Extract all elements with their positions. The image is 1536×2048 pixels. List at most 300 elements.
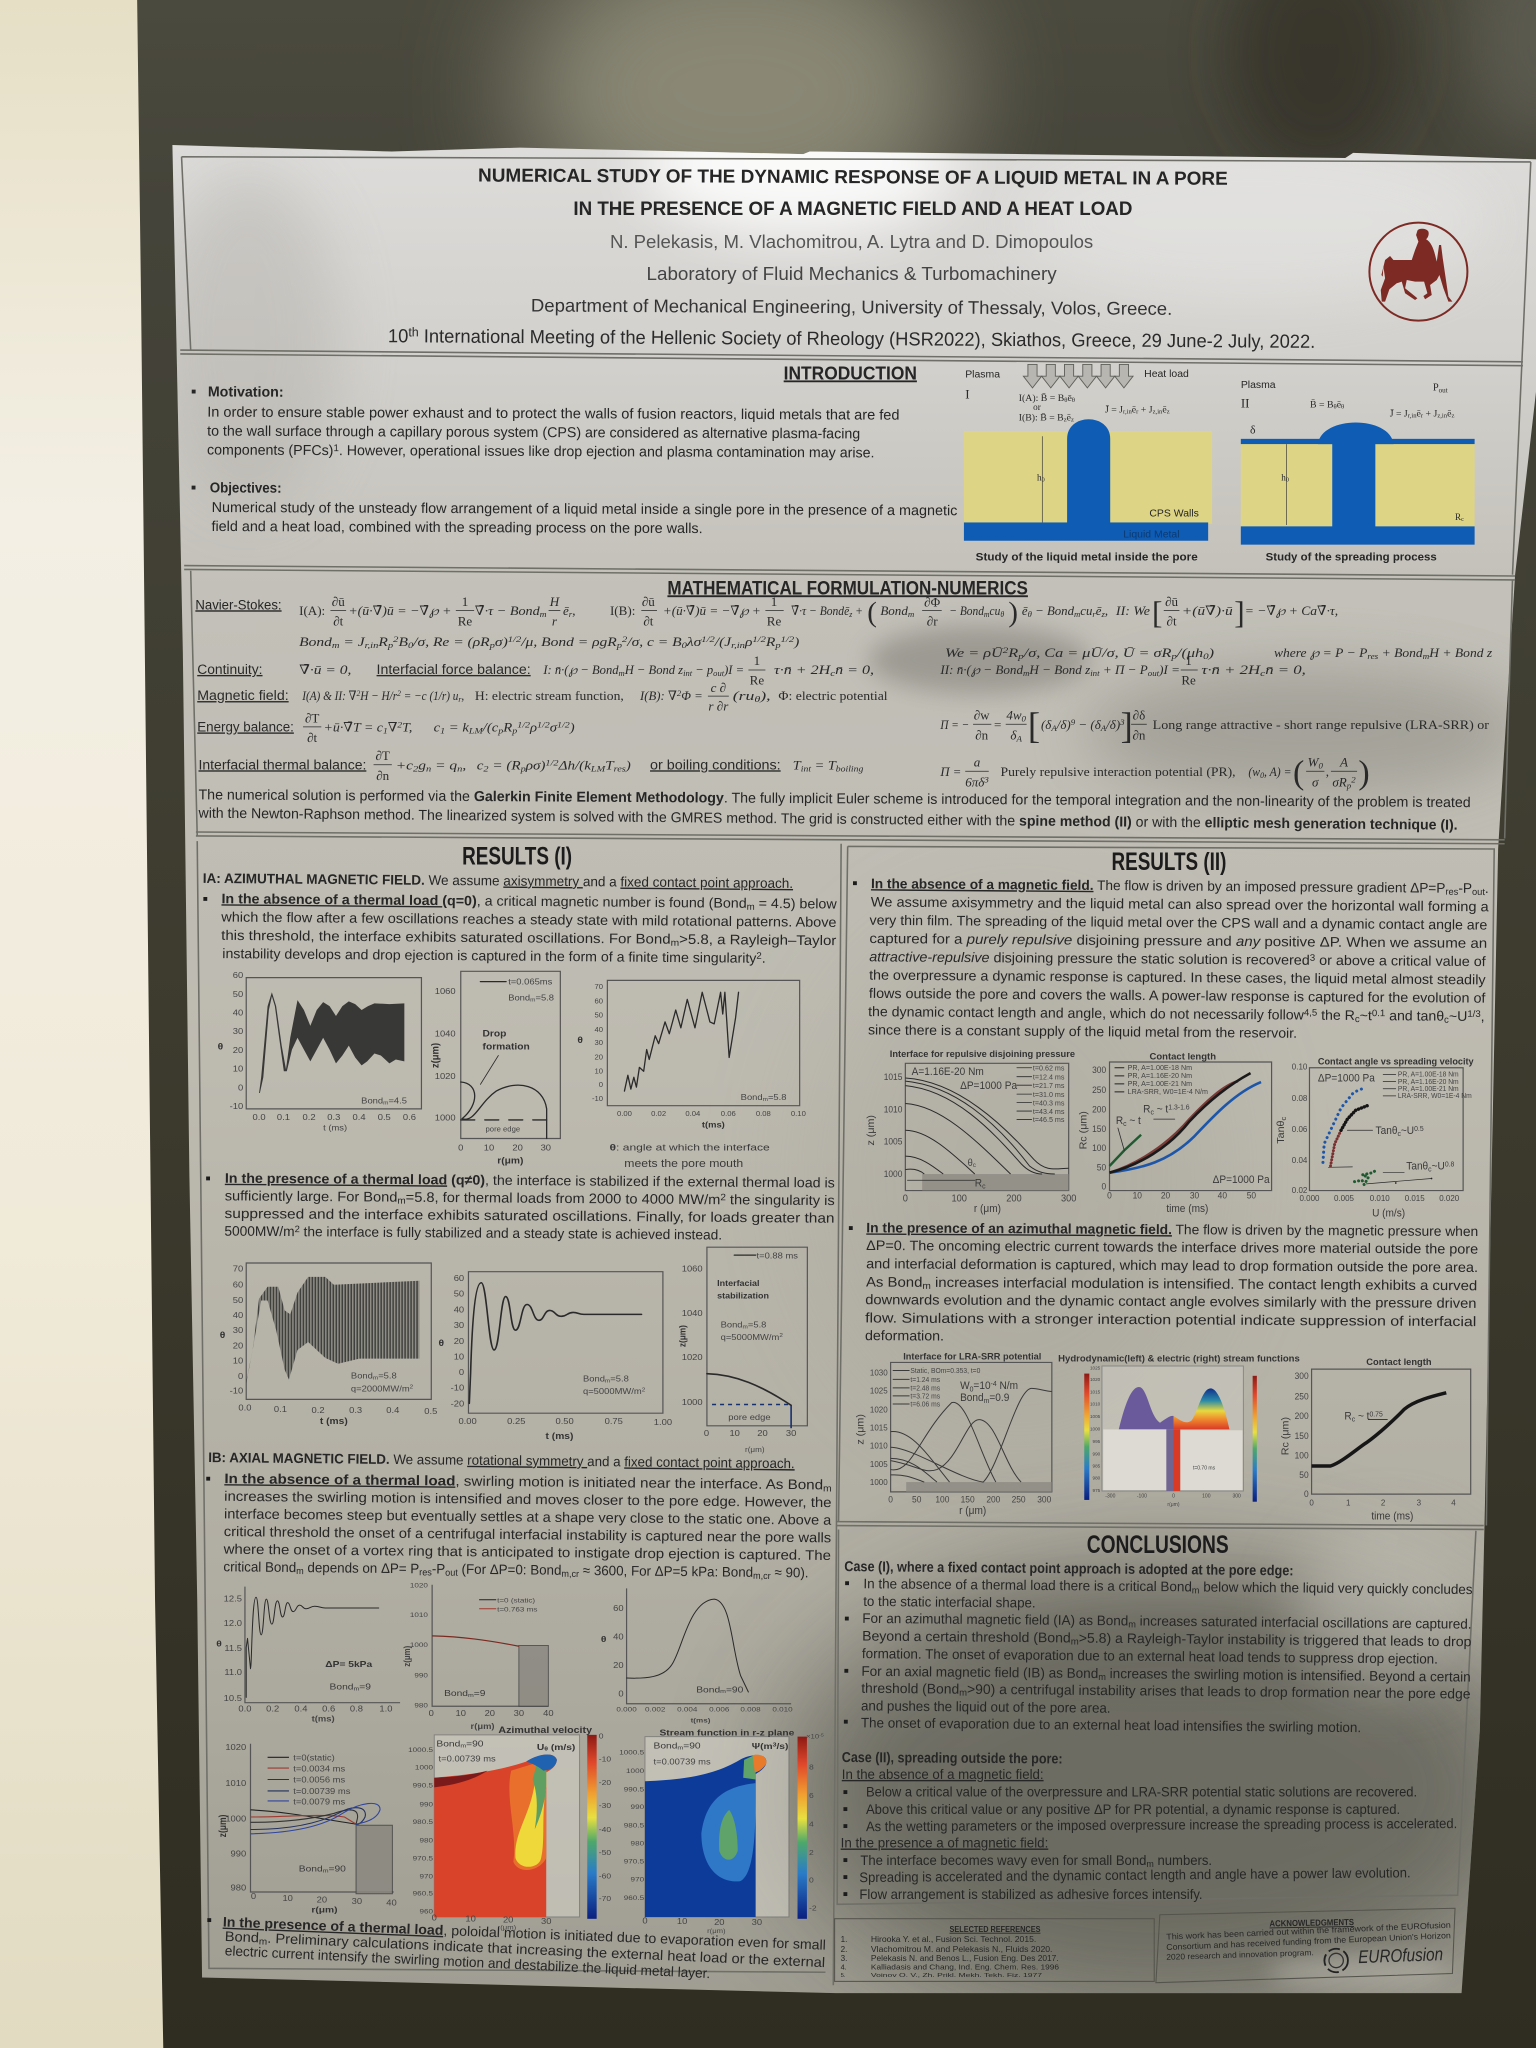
equation: momentum I(B): ( [867, 597, 877, 629]
text block: thermal load effect for axial field: Bondm. Preliminary calculations indicate that increasing the external heat load or the external [224, 1928, 825, 1971]
text block: IB axial magnetic field: increases the swirling motion is intensified and moves closer to the pore edge. However, the [224, 1488, 832, 1510]
equation: momentum II: ] [1234, 595, 1245, 630]
chart: theta vs time, Bond 5.8: 40 [595, 1025, 603, 1034]
chart: hydrodynamic and electric stream functions: 300 [1232, 1494, 1241, 1500]
chart: drop formation profile: 0 [458, 1143, 463, 1152]
chart: stream function contour: ×10-5 [806, 1733, 824, 1740]
title line 2: IN THE PRESENCE OF A MAGNETIC FIELD AND A HEAT LOAD [573, 199, 1132, 220]
equations: energy balance: ∂t [307, 730, 318, 745]
equation: momentum I(B): 1 [771, 594, 777, 609]
chart: interface for repulsive disjoining pressure: 100 [952, 1193, 967, 1205]
equation: momentum II: +(ū∇̄)·ū [1182, 603, 1233, 618]
chart: contact angle vs spreading velocity: 0.02 [1292, 1186, 1308, 1195]
text block: presence of azimuthal magnetic field [847, 1219, 1479, 1347]
chart: theta vs time, delta P 5 kPa: 0.0 [238, 1704, 252, 1713]
chart: theta vs time, Bond 4.5: 0.6 [403, 1112, 416, 1122]
equation: momentum I(B): Re [767, 614, 781, 629]
text block: IB axial magnetic field: IB: AXIAL MAGNETIC FIELD. We assume rotational symmetry and a fixed contact point approach. [208, 1449, 795, 1471]
equations: interfacial thermal balance: ∂T [375, 748, 390, 763]
equation: momentum I(B): +(ū·∇̄)ū = −∇̄℘ + [663, 603, 761, 618]
chart: azimuthal velocity contour: Uθ (m/s) [537, 1743, 575, 1753]
chart: theta vs time, q=2000: 10 [233, 1356, 243, 1365]
chart: drop formation profile: 20 [512, 1143, 523, 1152]
equations: interfacial thermal balance: or boiling conditions: [650, 757, 781, 772]
chart: contact length with magnetic field: Rc ~ t0.75 [1344, 1410, 1383, 1423]
chart: azimuthal velocity contour: -40 [599, 1826, 612, 1834]
equations: magnetic field: Φ: electric potential [778, 688, 888, 703]
chart: interface for LRA-SRR potential: 1010 [870, 1441, 888, 1451]
chart: theta vs time, Bond 4.5: 20 [233, 1045, 243, 1055]
text block: thermal load effect for axial field: electric current intensify the swirling motion and destabilize the liquid metal layer. [225, 1942, 711, 1981]
text block: case II without magnetic field: Above this critical value or any positive ΔP for PR potential, a dynamic response is captured. [866, 1801, 1400, 1817]
diagram I: liquid metal inside the pore: or [1033, 402, 1041, 412]
equations: magnetic field [197, 680, 888, 714]
text block: presence of azimuthal magnetic field: deformation. [865, 1327, 944, 1344]
text block: case II with magnetic field: ▪ [842, 1852, 848, 1869]
text block: funding note: 2020 research and innovation program. [1166, 1948, 1314, 1962]
chart: contact length for repulsive pressure: 250 [1092, 1085, 1106, 1095]
chart: azimuthal velocity contour: 990.5 [413, 1781, 433, 1789]
chart: hydrodynamic and electric stream functions: Hydrodynamic(left) & electric (right) stream functions [1058, 1353, 1300, 1364]
chart: contact length with magnetic field: 100 [1295, 1450, 1309, 1460]
chart: azimuthal velocity contour: 0 [432, 1913, 437, 1922]
chart: interface shapes over time, Bond 90: t=0(static) [293, 1753, 335, 1762]
chart: contact length for repulsive pressure: time (ms) [1166, 1204, 1208, 1215]
chart: contact length with magnetic field: Rc (μm) [1281, 1417, 1291, 1455]
chart: stream function contour: r(μm) [707, 1928, 726, 1935]
chart: theta vs time, Bond 5.8: 0.06 [721, 1109, 736, 1118]
reference list: Kalliadasis and Chang, Ind. Eng. Chem. Res. 1996 [871, 1965, 1059, 1972]
chart: theta vs time, q=2000: 0 [238, 1371, 243, 1381]
chart: theta vs time, delta P 5 kPa: 1.0 [379, 1704, 393, 1713]
chart: interface for LRA-SRR potential: 200 [986, 1494, 1001, 1505]
chart: hydrodynamic and electric stream functions: 1005 [1090, 1414, 1101, 1420]
text block: case I: The onset of evaporation due to an external heat load intensifies the swirling motion. [861, 1714, 1361, 1735]
chart: stream function contour [619, 1728, 824, 1935]
text block: IA azimuthal magnetic field: instability develops and drop ejection is captured in the form of a finite time singularity 2. [222, 945, 766, 966]
chart: contact length with magnetic field: 0 [1309, 1498, 1314, 1507]
chart: stream function contour: 30 [752, 1918, 762, 1927]
equation: momentum II: = −∇̄℘ + Ca∇̄·τ, [1245, 603, 1338, 618]
chart: contact length with magnetic field: 250 [1295, 1391, 1309, 1402]
chart: contact length for repulsive pressure: 300 [1092, 1065, 1106, 1075]
chart: interfacial stabilization profile: q=5000MW/m2 [721, 1332, 783, 1342]
equation: dimensionless numbers: We = ρŪ 2R p/σ, Ca = μŪ/σ, Ū = σR p/(μh 0) [945, 645, 1214, 661]
chart: theta vs time, q=5000: -20 [451, 1399, 464, 1408]
panel: introduction [191, 362, 1475, 563]
chart: interface for repulsive disjoining pressure: ΔP=1000 Pa [960, 1081, 1017, 1092]
chart: contact angle vs spreading velocity: 0.04 [1292, 1156, 1308, 1165]
chart: theta vs time, Bond 90: t(ms) [691, 1716, 711, 1724]
equations: LRA-SRR disjoining potential: (δA/δ)9 − (δA/δ)3 [1041, 717, 1125, 733]
chart: interface for repulsive disjoining pressure: t=0.62 ms [1033, 1063, 1065, 1073]
chart: interface for repulsive disjoining pressure: t=12.4 ms [1033, 1072, 1065, 1081]
equations: LRA-SRR disjoining potential: ∂δ [1133, 708, 1145, 723]
equations: purely repulsive potential: a [974, 755, 981, 770]
chart: interface shapes over time, Bond 90: 980 [231, 1883, 246, 1892]
chart: azimuthal velocity contour: 10 [465, 1914, 476, 1923]
chart: theta vs time, Bond 4.5: 10 [233, 1064, 243, 1074]
chart: contact angle vs spreading velocity [1276, 1056, 1474, 1220]
chart: theta vs time, Bond 4.5: 40 [233, 1008, 243, 1018]
chart: contact angle vs spreading velocity: ΔP=1000 Pa [1318, 1073, 1375, 1085]
laboratory: Laboratory of Fluid Mechanics & Turbomachinery [647, 263, 1058, 284]
text block: numerical method: The numerical solution is performed via the Galerkin Finite Element Methodology. The fully implicit Euler scheme is introduced for the temporal integration and the non-linearity of the problem is treated [199, 787, 1471, 811]
panel: results I [202, 844, 838, 1981]
chart: contact length for repulsive pressure: 200 [1092, 1104, 1106, 1114]
text block: presence of azimuthal magnetic field: and interfacial deformation is captured, which may lead to drop formation outside the pore area. [866, 1255, 1478, 1275]
text block: IA azimuthal magnetic field [202, 870, 838, 966]
caption: Study of the liquid metal inside the pore [976, 551, 1198, 563]
text block: funding note: This work has been carried out within the framework of the EUROfusion [1166, 1920, 1451, 1942]
chart: interface shapes over time, Bond 90: 1010 [225, 1779, 246, 1788]
chart: interface for repulsive disjoining pressure: t=21.7 ms [1033, 1081, 1065, 1090]
equation: momentum I(B): ∂ū [642, 594, 655, 609]
chart: theta vs time, Bond 4.5: θ [218, 1042, 223, 1052]
icon: EUROfusion logo [1324, 1943, 1443, 1972]
chart: azimuthal velocity contour: -10 [599, 1755, 612, 1763]
chart: stream function contour: 8 [809, 1763, 814, 1771]
text block: motivation: Motivation: [208, 384, 284, 401]
text block: case II without magnetic field: ▪ [842, 1801, 848, 1818]
diagram II: spreading process: II [1241, 396, 1250, 411]
chart: theta vs time, q=2000: 0.2 [311, 1406, 325, 1415]
equations: purely repulsive potential: A [1339, 755, 1349, 770]
chart: theta vs time, q=5000: 0.25 [507, 1417, 525, 1426]
chart: theta vs time, q=2000: 0.1 [274, 1404, 287, 1414]
chart: hydrodynamic and electric stream functions: 1020 [1090, 1377, 1101, 1383]
equations: purely repulsive potential [939, 755, 1370, 792]
chart: theta vs time, Bond 5.8: θ [577, 1035, 583, 1046]
chart: interfacial stabilization profile: 1060 [682, 1264, 703, 1273]
reference list: Vlachomitrou M. and Pelekasis N., Fluids 2020. [871, 1945, 1052, 1954]
equation: momentum I(B): ∂r [927, 614, 938, 629]
chart: interfacial stabilization profile: 10 [729, 1428, 740, 1438]
chart: contact angle vs spreading velocity: 0.06 [1292, 1125, 1308, 1134]
chart: theta vs time, q=5000: 30 [454, 1321, 464, 1330]
chart: contact angle vs spreading velocity: PR, A=1.16E-20 Nm [1398, 1079, 1459, 1086]
chart: theta vs time, q=2000: 20 [233, 1341, 243, 1350]
chart: theta vs time, q=5000: 40 [454, 1305, 464, 1314]
chart: interface for repulsive disjoining pressure: 1005 [884, 1136, 903, 1147]
chart: azimuthal velocity contour: 960 [419, 1907, 433, 1915]
text block: IB axial magnetic field: where the onset of a vortex ring that is anticipated to instigate drop ejection is captured. The [222, 1541, 831, 1563]
chart: contact length for repulsive pressure: LRA-SRR, W0=1E-4 N/m [1128, 1087, 1208, 1096]
chart: interface shapes over time, Bond 90: 0 [251, 1892, 256, 1901]
chart: theta vs time, Bond 5.8: t(ms) [702, 1120, 725, 1129]
chart: theta vs time, delta P 5 kPa: 0.2 [266, 1704, 279, 1713]
equations: LRA-SRR disjoining potential: Π = − [940, 717, 969, 732]
text block: case II without magnetic field: As the wetting parameters or the imposed overpressure increase the spreading process is accelerated. [866, 1815, 1457, 1834]
chart: interface shape, Bond 9: 20 [485, 1709, 495, 1718]
chart: azimuthal velocity contour [408, 1726, 612, 1931]
chart: interface for LRA-SRR potential: Bondm=0.9 [960, 1393, 1010, 1404]
equation: momentum II: [ [1152, 595, 1162, 630]
text block: thermal load effect for axial field [206, 1912, 826, 1981]
chart: theta vs time, Bond 4.5: 0.3 [327, 1112, 340, 1122]
diagram II: spreading process: J̄ = Jr,inēr + Jz,inēz [1390, 408, 1454, 420]
equations: purely repulsive potential: W0 [1308, 755, 1323, 771]
chart: interface shapes over time, Bond 90: 20 [317, 1895, 327, 1905]
reference list: 4. [841, 1963, 847, 1972]
chart: theta vs time, delta P 5 kPa: t(ms) [312, 1714, 335, 1723]
chart: theta vs time, Bond 4.5: 0.0 [253, 1112, 266, 1122]
text block: IB axial magnetic field: In the absence of a thermal load , swirling motion is initiated near the interface. As Bond m [224, 1470, 832, 1494]
chart: azimuthal velocity contour: Azimuthal velocity [498, 1726, 593, 1736]
chart: stream function contour: 960.5 [624, 1894, 644, 1902]
diagram II: spreading process: δ [1250, 424, 1256, 437]
chart: interface for LRA-SRR potential: 1000 [870, 1478, 888, 1487]
chart: theta vs time, Bond 5.8: 60 [595, 997, 603, 1005]
text block: absence of magnetic field: captured for a purely repulsive disjoining pressure and any positive ΔP. When we assume an [869, 930, 1487, 951]
equations: energy balance: Energy balance: [197, 719, 294, 734]
chart: stream function contour: 1000.5 [619, 1748, 644, 1756]
chart: interface for repulsive disjoining pressure: 200 [1006, 1193, 1022, 1205]
caption: pore mouth: meets the pore mouth [624, 1158, 743, 1170]
chart: theta vs time, Bond 5.8: 0.02 [651, 1109, 666, 1118]
chart: interfacial stabilization profile: Bondm=5.8 [721, 1320, 766, 1331]
chart: theta vs time, Bond 4.5: Bondm=4.5 [361, 1096, 407, 1107]
diagram I: liquid metal inside the pore: Liquid Metal [1123, 529, 1180, 540]
chart: hydrodynamic and electric stream functions [1058, 1353, 1300, 1508]
chart: interface for LRA-SRR potential: 0 [888, 1494, 893, 1505]
chart: theta vs time, delta P 5 kPa: 11.0 [224, 1668, 242, 1677]
chart: contact length for repulsive pressure: 40 [1218, 1190, 1227, 1201]
chart: azimuthal velocity contour: 20 [503, 1915, 514, 1924]
equation: momentum II: II: We [1115, 603, 1150, 618]
chart: contact length with magnetic field: time (ms) [1371, 1511, 1413, 1523]
chart: theta vs time, delta P 5 kPa: 0.8 [350, 1704, 363, 1713]
equations: LRA-SRR disjoining potential: 4w0 [1006, 708, 1027, 724]
chart: stream function contour: 980 [631, 1839, 644, 1847]
chart: interface for repulsive disjoining pressure: Rc [975, 1178, 986, 1190]
chart: theta vs time, q=5000 [439, 1272, 672, 1442]
chart: theta vs time, Bond 5.8: 0.04 [685, 1109, 700, 1118]
diagram I: liquid metal inside the pore: Heat load [1144, 369, 1189, 380]
chart: theta vs time, q=2000: 70 [233, 1264, 243, 1274]
diagram I: liquid metal inside the pore: I [965, 386, 970, 401]
chart: stream function contour: 980.5 [624, 1821, 644, 1829]
equations: continuity and interfacial force balance: Interfacial force balance: [377, 662, 531, 677]
equations: purely repulsive potential: 6πδ3 [965, 774, 989, 789]
chart: interface shape, Bond 9: t=0 (static) [497, 1596, 536, 1604]
chart: interface shape, Bond 9 [401, 1581, 554, 1731]
chart: hydrodynamic and electric stream functions: 1015 [1090, 1390, 1101, 1396]
text block: case I: ▪ [844, 1610, 850, 1627]
equation: momentum I(B): ∂t [643, 614, 654, 629]
chart: theta vs time, q=2000: 0.5 [424, 1406, 437, 1416]
authors: N. Pelekasis, M. Vlachomitrou, A. Lytra and D. Dimopoulos [610, 231, 1093, 252]
text block: case I: ▪ [843, 1663, 849, 1680]
chart: interface for repulsive disjoining pressure: θc [968, 1158, 977, 1170]
equations: LRA-SRR disjoining potential: ∂n [1132, 727, 1146, 742]
text block: motivation: ▪ [191, 383, 196, 400]
chart: drop formation profile: Drop [483, 1029, 506, 1039]
chart: interface for LRA-SRR potential: z (μm) [855, 1414, 866, 1445]
chart: interface for repulsive disjoining pressure: t=31.0 ms [1033, 1090, 1065, 1099]
text block: thermal load effect for axial field: In the presence of a thermal load , poloidal motion is initiated due to evaporation even for small [223, 1914, 826, 1953]
chart: contact length with magnetic field: 1 [1346, 1498, 1351, 1507]
chart: theta vs time, Bond 5.8 [577, 980, 806, 1153]
chart: contact angle vs spreading velocity: 0.015 [1405, 1194, 1425, 1203]
chart: interface for repulsive disjoining pressure: 1015 [884, 1072, 903, 1082]
text block: IA azimuthal magnetic field: In the absence of a thermal load (q=0), a critical magnetic number is found (Bond m = 4.5) below [221, 890, 838, 913]
reference list: Hirooka Y. et al., Fusion Sci. Technol. 2015. [871, 1935, 1036, 1944]
text block: motivation [191, 383, 900, 462]
chart: theta vs time, Bond 4.5: -10 [230, 1101, 243, 1111]
chart: theta vs time, Bond 4.5 [218, 970, 421, 1133]
chart: interface for repulsive disjoining pressure: 300 [1061, 1193, 1076, 1205]
chart: interface for repulsive disjoining pressure: 1000 [884, 1169, 903, 1179]
chart: contact length for repulsive pressure: 0 [1101, 1181, 1106, 1192]
chart: stream function contour: 990 [631, 1803, 644, 1811]
chart: interface shapes over time, Bond 90: t=0.0056 ms [293, 1775, 346, 1784]
equations: LRA-SRR disjoining potential: Long range attractive - short range repulsive (LRA-SRR) or [1153, 717, 1490, 732]
chart: stream function contour: -2 [809, 1904, 817, 1912]
header: title block [388, 166, 1467, 353]
heading: conclusions: CONCLUSIONS [1087, 1532, 1229, 1559]
heading: introduction: INTRODUCTION [784, 362, 917, 383]
equation: momentum II: ∂ū [1165, 594, 1179, 609]
equations: energy balance: ∂T [305, 710, 319, 725]
text block: case I: and pushes the liquid out of the pore area. [861, 1697, 1111, 1716]
diagram I: liquid metal inside the pore: h0 [1037, 473, 1045, 484]
chart: theta vs time, delta P 5 kPa: 12.0 [224, 1619, 242, 1628]
chart: theta vs time, q=5000: 0.50 [555, 1417, 574, 1426]
chart: interface for repulsive disjoining pressure: 0 [903, 1193, 908, 1205]
chart: interface shapes over time, Bond 90: 10 [282, 1894, 293, 1903]
chart: theta vs time, q=5000: 0 [459, 1368, 464, 1377]
chart: contact angle vs spreading velocity: Contact angle vs spreading velocity [1318, 1056, 1474, 1067]
chart: stream function contour: 4 [809, 1820, 814, 1828]
chart: hydrodynamic and electric stream functions: 100 [1202, 1494, 1211, 1500]
equation: momentum I(B): − Bondmcuθ [949, 603, 1005, 619]
text block: thermal load: In the presence of a thermal load (q≠0), the interface is stabilized if the external thermal load is [225, 1170, 835, 1190]
chart: interface for repulsive disjoining pressure: t=40.3 ms [1033, 1098, 1065, 1107]
text block: absence of magnetic field: the overpressure a dynamic response is captured. In these cases, the liquid metal almost steadily [869, 967, 1486, 987]
chart: theta vs time, delta P 5 kPa [216, 1587, 400, 1723]
chart: azimuthal velocity contour: -20 [599, 1779, 612, 1787]
chart: interface shape, Bond 9: 990 [414, 1671, 428, 1679]
chart: contact angle vs spreading velocity: 0.000 [1299, 1194, 1320, 1203]
text block: numerical method [198, 787, 1471, 834]
chart: hydrodynamic and electric stream functions: 0 [1172, 1494, 1175, 1500]
heading: references: SELECTED REFERENCES [950, 1924, 1041, 1934]
heading: results II: RESULTS (II) [1112, 849, 1226, 876]
chart: stream function contour: Ψ(m3/s) [752, 1742, 788, 1752]
chart: interfacial stabilization profile: t=0.88 ms [756, 1251, 798, 1260]
chart: interface for LRA-SRR potential: Interface for LRA-SRR potential [903, 1351, 1041, 1361]
chart: theta vs time, Bond 5.8: 0.10 [791, 1109, 806, 1118]
equations: LRA-SRR disjoining potential: ∂w [974, 708, 990, 723]
chart: interface for repulsive disjoining pressure: 1010 [884, 1104, 903, 1114]
chart: contact angle vs spreading velocity: PR, A=1.00E-21 Nm [1398, 1086, 1459, 1093]
chart: theta vs time, q=2000: 30 [233, 1325, 243, 1335]
chart: stream function contour: t=0.00739 ms [654, 1757, 711, 1766]
chart: theta vs time, Bond 4.5: 0.2 [303, 1112, 316, 1122]
chart: interface shapes over time, Bond 90: t=0.00739 ms [293, 1787, 351, 1796]
chart: interface for repulsive disjoining pressure: r (μm) [974, 1204, 1001, 1215]
chart: interface for LRA-SRR potential: 1015 [870, 1423, 888, 1432]
chart: theta vs time, Bond 90: 40 [613, 1632, 624, 1641]
equations: purely repulsive potential: , [1326, 764, 1329, 779]
chart: drop formation profile: 10 [484, 1143, 494, 1152]
text block: thermal load: suppressed and the interface exhibits saturated oscillations. Finally, for loads greater than [225, 1205, 835, 1226]
chart: contact angle vs spreading velocity: Tanθc~U0.5 [1376, 1124, 1424, 1138]
text block: case I: threshold (Bondm>90) a centrifugal instability arises that leads to drop formation near the pore edge [861, 1680, 1471, 1703]
chart: azimuthal velocity contour: 980 [419, 1836, 433, 1845]
text block: case II with magnetic field [841, 1835, 1411, 1903]
panel frame lines [180, 157, 1531, 1985]
chart: contact length with magnetic field [1281, 1357, 1471, 1523]
title line 1: NUMERICAL STUDY OF THE DYNAMIC RESPONSE OF A LIQUID METAL IN A PORE [478, 166, 1228, 190]
text block: absence of magnetic field [851, 875, 1489, 1042]
equations: continuity and interfacial force balance [197, 653, 1306, 687]
chart: drop formation profile [430, 971, 560, 1166]
equations: purely repulsive potential: Π = [939, 764, 961, 779]
text block: case II with magnetic field: The interface becomes wavy even for small Bondm numbers. [860, 1852, 1212, 1869]
panel: conclusions [841, 1532, 1473, 1903]
text block: absence of magnetic field: flows outside the pore and covers the walls. A power-law response is captured for the evolution of [869, 985, 1486, 1006]
diagram II: spreading process [1241, 380, 1475, 563]
equation: momentum I(A): ∇̄·τ − Bond m [475, 603, 547, 619]
equation: momentum I(A): +(ū·∇̄)ū = −∇̄℘ + [348, 603, 452, 618]
chart: interface shape, Bond 9: 980 [414, 1701, 428, 1710]
equations: energy balance: +ū·∇̄T = c 1∇2T, [324, 719, 412, 735]
chart: interface for repulsive disjoining pressure: Interface for repulsive disjoining pressure [890, 1049, 1075, 1059]
diagram II: spreading process: Plasma [1241, 380, 1276, 391]
equations: purely repulsive potential: Purely repulsive interaction potential (PR), [1000, 764, 1236, 779]
chart: interface shape, Bond 9: 10 [456, 1709, 466, 1718]
chart: interface shapes over time, Bond 90: z(μm) [217, 1815, 229, 1837]
chart: interface for repulsive disjoining pressure: t=43.4 ms [1033, 1107, 1065, 1116]
equations: magnetic field: c ∂ [711, 680, 726, 695]
equations: LRA-SRR disjoining potential: [ [1028, 705, 1040, 746]
equations: magnetic field: I(A) & II: ∇2H − H/r2 = −c (1/r) ur, [301, 688, 464, 704]
chart: theta vs time, Bond 90: 0.008 [740, 1705, 761, 1713]
equations: magnetic field: (ru θ), [733, 688, 771, 704]
text block: IB axial magnetic field [204, 1449, 832, 1582]
text block: case II without magnetic field: ▪ [842, 1784, 848, 1801]
chart: hydrodynamic and electric stream functions: 1010 [1090, 1401, 1101, 1407]
chart: theta vs time, Bond 90: 20 [613, 1661, 624, 1670]
equation: dimensionless numbers: Bond m = J r,inRp2B0/σ, Re = (ρR pσ) 1/2/μ, Bond = ρgR p2/σ, c = B 0λσ 1/2/(J r,inρ1/2Rp1/2) [299, 634, 799, 650]
chart: interface shape, Bond 9: t=0.763 ms [497, 1605, 538, 1613]
chart: contact length for repulsive pressure: PR, A=1.00E-18 Nm [1128, 1063, 1192, 1072]
diagram I: liquid metal inside the pore: I(B): B̄ = Bzēz [1019, 412, 1074, 424]
chart: azimuthal velocity contour: 30 [541, 1917, 552, 1926]
equation: dimensionless numbers [299, 634, 1492, 661]
equations: magnetic field: r ∂r [708, 699, 729, 714]
chart: hydrodynamic and electric stream functions: 975 [1093, 1488, 1101, 1494]
chart: theta vs time, Bond 4.5: 0.5 [378, 1112, 391, 1122]
equation: momentum I(A): ēr, [563, 603, 575, 619]
text block: thermal load effect for axial field: ▪ [206, 1912, 212, 1929]
chart: interface for LRA-SRR potential: 1020 [870, 1405, 888, 1414]
equations: energy balance [197, 710, 575, 745]
text block: motivation: to the wall surface through a capillary porous system (CPS) are considered as alternative plasma-facing [207, 424, 860, 442]
text block: case I: ▪ [844, 1575, 850, 1592]
meeting: 10th International Meeting of the Hellenic Society of Rheology (HSR2022), Skiathos, Greece, 29 June-2 July, 2022. [388, 324, 1315, 353]
chart: theta vs time, Bond 90: 60 [613, 1604, 624, 1613]
text block: case I: Beyond a certain threshold (Bond m>5.8) a Rayleigh-Taylor instability is triggered that leads to drop [862, 1627, 1472, 1650]
text block: absence of magnetic field: We assume axisymmetry and the liquid metal can also spread over the horizontal wall forming a [871, 893, 1489, 914]
chart: azimuthal velocity contour: -50 [599, 1849, 612, 1857]
diagram II: spreading process: B̄ = Bθēθ [1310, 399, 1344, 411]
equation: momentum II [1115, 594, 1338, 630]
chart: azimuthal velocity contour: 970 [419, 1872, 433, 1880]
reference list [841, 1935, 1059, 1979]
